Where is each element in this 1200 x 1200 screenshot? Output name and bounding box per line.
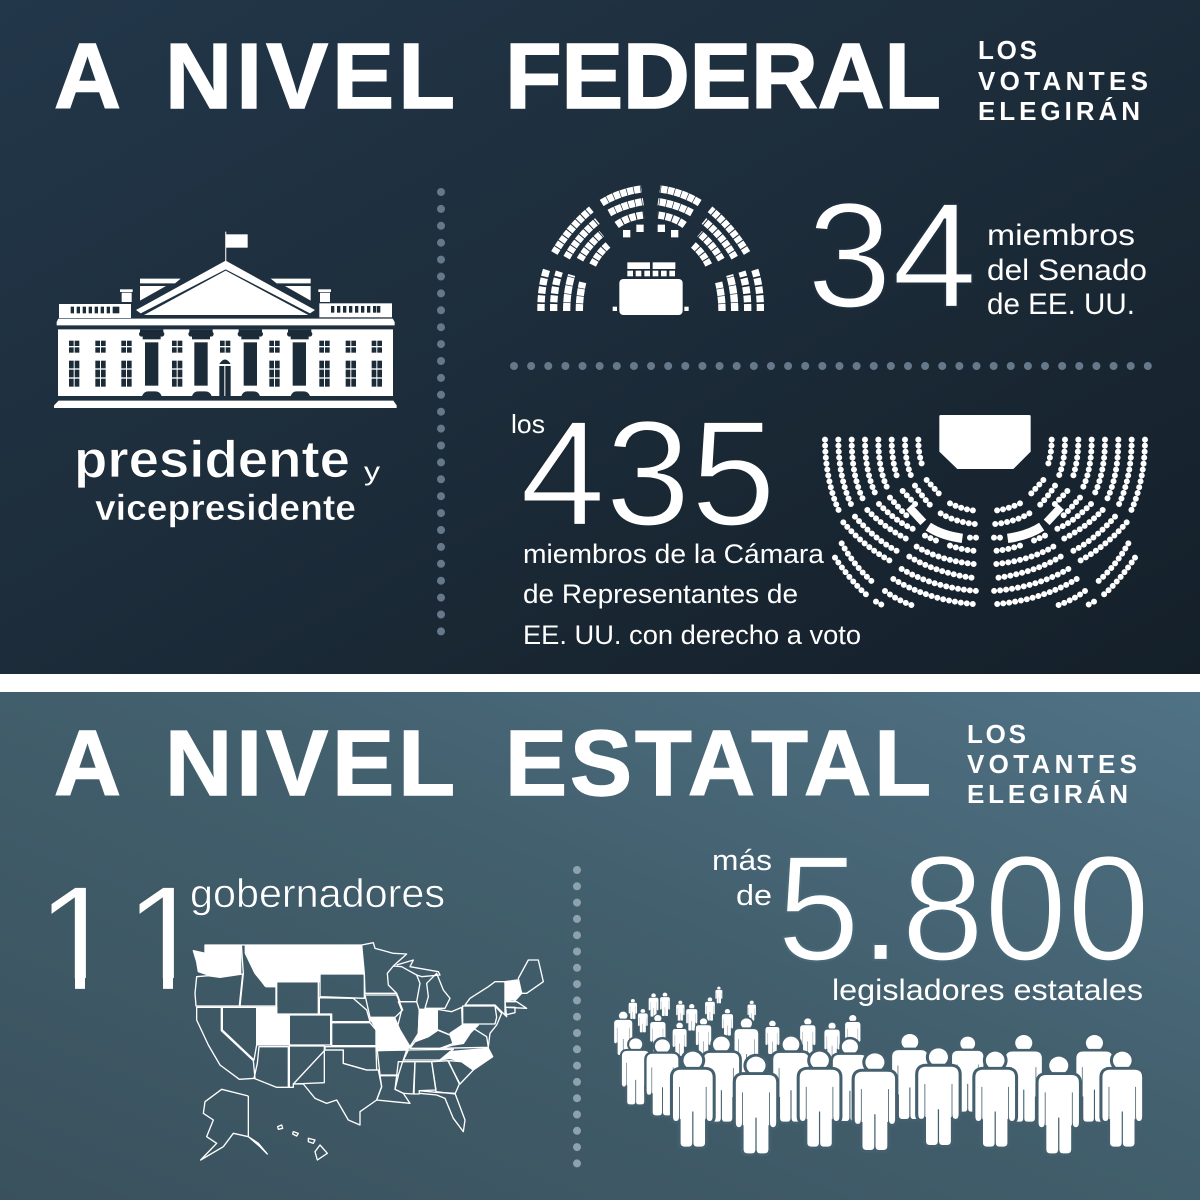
alaska	[201, 1089, 267, 1160]
heading: a nivel federal: A	[54, 24, 121, 128]
text: gobernadores: gobernadores	[190, 872, 445, 916]
text: más de: de	[736, 880, 772, 912]
subheading: los votantes elegirán (federal): LOS	[978, 35, 1037, 65]
text: miembros del Senado: de EE. UU.	[987, 288, 1135, 321]
subheading: los votantes elegirán (estatal)	[967, 719, 1137, 809]
heading: a nivel estatal: A	[54, 711, 121, 815]
heading: a nivel federal: FEDERAL	[505, 24, 941, 128]
number: 435: 435	[520, 389, 776, 557]
white divider band	[0, 674, 1200, 692]
other states	[195, 943, 543, 1132]
text: miembros de la cámara: miembros de la Cámara	[523, 539, 825, 569]
heading: a nivel estatal: ESTATAL	[505, 711, 931, 815]
subheading: los votantes elegirán (federal): ELEGIRÁN	[978, 96, 1140, 126]
text: legisladores estatales: legisladores estatales	[832, 974, 1143, 1007]
number: 11: 11	[36, 854, 207, 1022]
text: más de: más	[712, 845, 772, 877]
text: miembros de la cámara	[523, 539, 861, 650]
panel: state background	[0, 692, 1200, 1200]
subheading: los votantes elegirán (estatal): VOTANTES	[967, 749, 1137, 779]
text: más de	[712, 845, 772, 912]
subheading: los votantes elegirán (estatal): LOS	[967, 719, 1026, 749]
subheading: los votantes elegirán (federal)	[978, 35, 1148, 126]
label: presidente y vicepresidente	[74, 431, 380, 528]
text: los: los	[511, 409, 545, 439]
hawaii	[278, 1125, 327, 1160]
states electing governors	[193, 945, 522, 1070]
dotted divider horizontal	[514, 362, 1148, 370]
icon: house chamber	[825, 415, 1145, 607]
number: 5.800: 5.800	[777, 824, 1150, 992]
subheading: los votantes elegirán (federal): VOTANTES	[978, 66, 1148, 96]
icon: senate chamber	[541, 189, 760, 315]
heading: a nivel federal: NIVEL	[165, 24, 455, 128]
heading: a nivel estatal	[54, 711, 931, 815]
panel: federal background	[0, 0, 1200, 674]
icon: crowd of people	[614, 987, 1142, 1153]
label: presidente y vicepresidente: y	[364, 456, 380, 486]
label: presidente y vicepresidente: vicepresidente	[95, 487, 356, 528]
map: united states	[193, 943, 543, 1160]
number: 34: 34	[807, 171, 977, 339]
text: miembros del Senado: miembros	[987, 219, 1135, 252]
dotted divider vertical (state)	[573, 870, 581, 1164]
icon: white house	[54, 232, 397, 408]
text: miembros de la cámara: de Representantes de	[523, 579, 798, 609]
dotted divider vertical (federal)	[437, 192, 445, 634]
text: miembros del Senado: del Senado	[987, 254, 1147, 287]
subheading: los votantes elegirán (estatal): ELEGIRÁN	[967, 779, 1128, 809]
text: miembros de la cámara: EE. UU. con derecho a voto	[523, 620, 861, 650]
label: presidente y vicepresidente: presidente	[74, 431, 350, 489]
text: miembros del Senado	[987, 219, 1147, 321]
heading: a nivel federal	[54, 24, 941, 128]
heading: a nivel estatal: NIVEL	[165, 711, 455, 815]
